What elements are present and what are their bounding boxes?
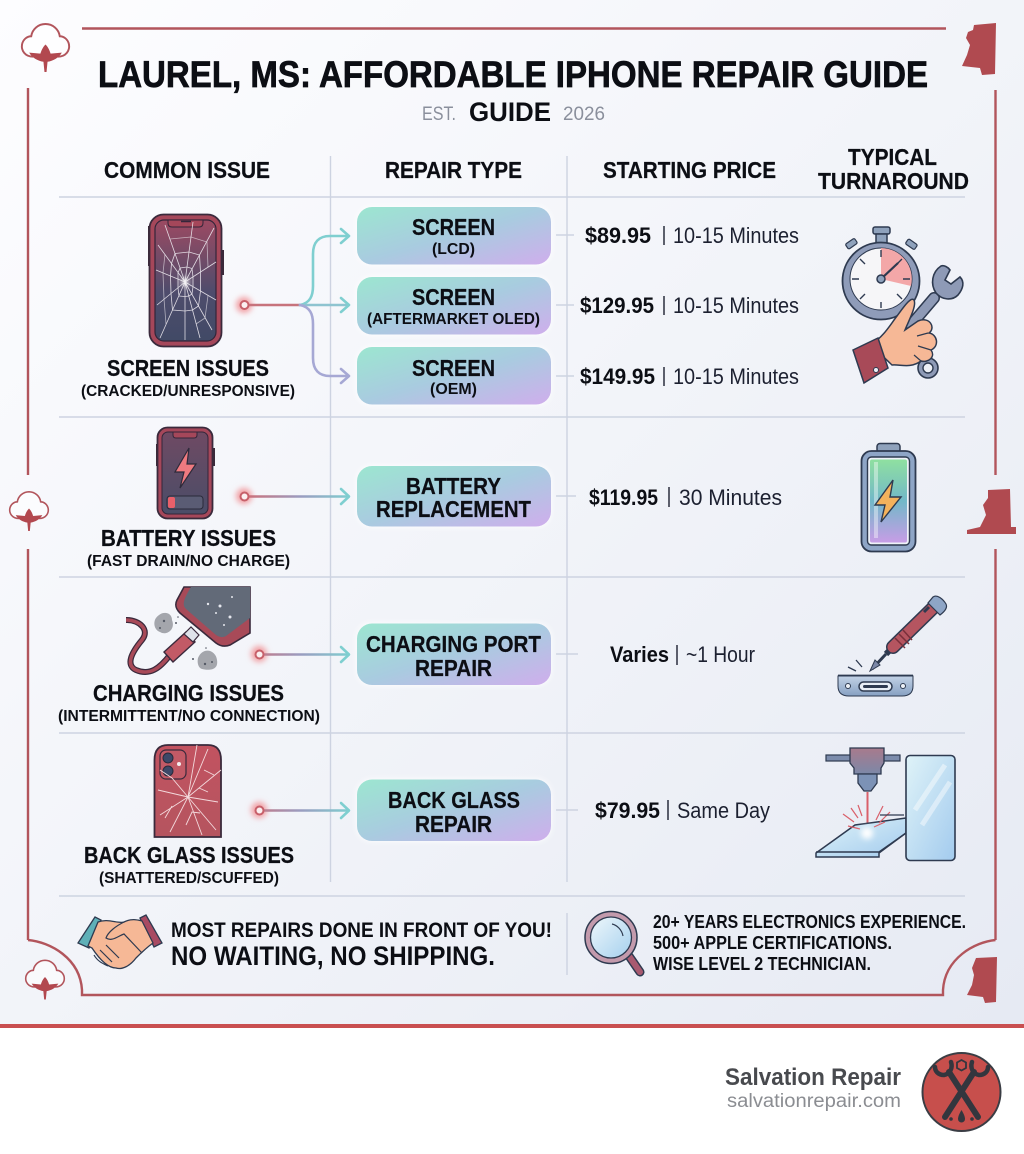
icon: cracked phone screen (148, 214, 224, 346)
price: aftermarket OLED screen: $129.95 (580, 293, 654, 318)
subtitle: GUIDE (469, 97, 551, 127)
icon: Mississippi state top right (962, 23, 996, 75)
label: back glass issues: (SHATTERED/SCUFFED) (99, 870, 279, 887)
label: battery issues (87, 525, 290, 570)
icon: screwdriver and charging port (838, 596, 947, 696)
icon: Mississippi state bottom right (967, 957, 997, 1003)
icon: charging cable, phone and debris (126, 587, 250, 672)
pill: screen aftermarket OLED: SCREEN (412, 284, 495, 310)
price: LCD screen (585, 223, 799, 248)
pill: screen aftermarket OLED: (AFTERMARKET OLED) (367, 311, 540, 328)
label: screen issues: (CRACKED/UNRESPONSIVE) (81, 383, 295, 400)
callout: repairs done in front of you: MOST REPAIRS DONE IN FRONT OF YOU! (171, 919, 552, 942)
label: charging issues: CHARGING ISSUES (93, 680, 284, 706)
callout: technician credentials: 20+ YEARS ELECTRONICS EXPERIENCE. (653, 911, 966, 932)
label: battery issues: BATTERY ISSUES (101, 525, 276, 551)
price: back glass: Same Day (677, 798, 770, 823)
label: back glass issues: BACK GLASS ISSUES (84, 842, 294, 868)
price: battery: $119.95 (589, 485, 658, 510)
column headers: STARTING PRICE (603, 157, 776, 183)
column headers: REPAIR TYPE (385, 157, 522, 183)
pill: back glass repair (357, 780, 551, 841)
arrow: charging issue to charging port repair (251, 646, 349, 662)
price: aftermarket OLED screen (580, 293, 799, 318)
label: screen issues: SCREEN ISSUES (107, 355, 269, 381)
price: charging port: ~1 Hour (686, 642, 755, 667)
price: LCD screen: $89.95 (585, 223, 651, 248)
subtitle (422, 97, 605, 127)
arrow: battery issue to battery replacement (236, 488, 349, 504)
label: battery issues: (FAST DRAIN/NO CHARGE) (87, 553, 290, 570)
icon: phone low battery (156, 428, 215, 518)
pill: screen LCD (357, 207, 551, 264)
callout: repairs done in front of you: NO WAITING, NO SHIPPING. (171, 941, 495, 971)
pill: screen OEM (357, 347, 551, 404)
icon: cotton boll middle left (10, 492, 48, 531)
pill: battery replacement: BATTERY (406, 473, 501, 499)
decorative frame (28, 28, 996, 995)
label: screen issues (81, 355, 295, 400)
footer brand text: Salvation Repair (725, 1064, 901, 1091)
pill: battery replacement (357, 466, 551, 526)
price: aftermarket OLED screen: 10-15 Minutes (673, 293, 799, 318)
callout: technician credentials (585, 911, 966, 974)
connector: screen issue to three repair types (236, 229, 349, 383)
pill: back glass repair: REPAIR (415, 811, 492, 837)
icon: cracked back glass phone (154, 745, 221, 837)
pill: screen aftermarket OLED (357, 277, 551, 334)
label: charging issues (58, 680, 320, 725)
price: battery: 30 Minutes (679, 485, 782, 510)
label: charging issues: (INTERMITTENT/NO CONNECTION) (58, 708, 320, 725)
price: OEM screen: 10-15 Minutes (673, 364, 799, 389)
column headers: TURNAROUND (818, 168, 969, 194)
callout: technician credentials: WISE LEVEL 2 TECHNICIAN. (653, 953, 871, 974)
pill: screen LCD: SCREEN (412, 214, 495, 240)
subtitle: 2026 (563, 104, 605, 125)
icon: Mississippi state middle right (967, 489, 1016, 534)
callout: repairs done in front of you (78, 915, 552, 971)
icon: handshake (78, 915, 162, 969)
icon: battery with bolt (862, 444, 916, 552)
icon: stopwatch and wrench in hand (842, 227, 963, 383)
pill: screen LCD: (LCD) (432, 241, 475, 258)
column headers: COMMON ISSUE (104, 157, 270, 183)
price: LCD screen: 10-15 Minutes (673, 223, 799, 248)
title: LAUREL, MS: AFFORDABLE IPHONE REPAIR GUIDE (98, 53, 928, 95)
pill: charging port repair: CHARGING PORT (366, 631, 541, 657)
label: back glass issues (84, 842, 294, 887)
pill: screen OEM: SCREEN (412, 355, 495, 381)
price: battery (589, 485, 782, 510)
red footer divider (0, 1024, 1024, 1028)
subtitle: EST. (422, 104, 456, 125)
logo: crossed wrenches badge (922, 1053, 1000, 1131)
column headers (104, 144, 969, 194)
price: back glass (595, 798, 770, 823)
pill: charging port repair: REPAIR (415, 655, 492, 681)
icon: magnifying glass (585, 912, 640, 972)
footer brand text: salvationrepair.com (727, 1091, 901, 1112)
icon: cotton boll bottom left (26, 960, 64, 1000)
price: charging port: Varies (610, 642, 669, 667)
icon: laser and glass panel (816, 748, 955, 860)
pill: screen OEM: (OEM) (430, 381, 477, 398)
price: OEM screen: $149.95 (580, 364, 655, 389)
arrow: back glass issue to back glass repair (251, 802, 349, 818)
table grid lines (59, 156, 965, 975)
column headers: TYPICAL (848, 144, 937, 170)
icon: cotton boll top left (22, 24, 69, 72)
price: charging port (610, 642, 755, 667)
callout: technician credentials: 500+ APPLE CERTIFICATIONS. (653, 932, 892, 953)
footer brand text (725, 1064, 901, 1112)
price: back glass: $79.95 (595, 798, 660, 823)
price: OEM screen (580, 364, 799, 389)
pill: back glass repair: BACK GLASS (388, 787, 520, 813)
pill: charging port repair (357, 624, 551, 685)
pill: battery replacement: REPLACEMENT (376, 496, 531, 522)
